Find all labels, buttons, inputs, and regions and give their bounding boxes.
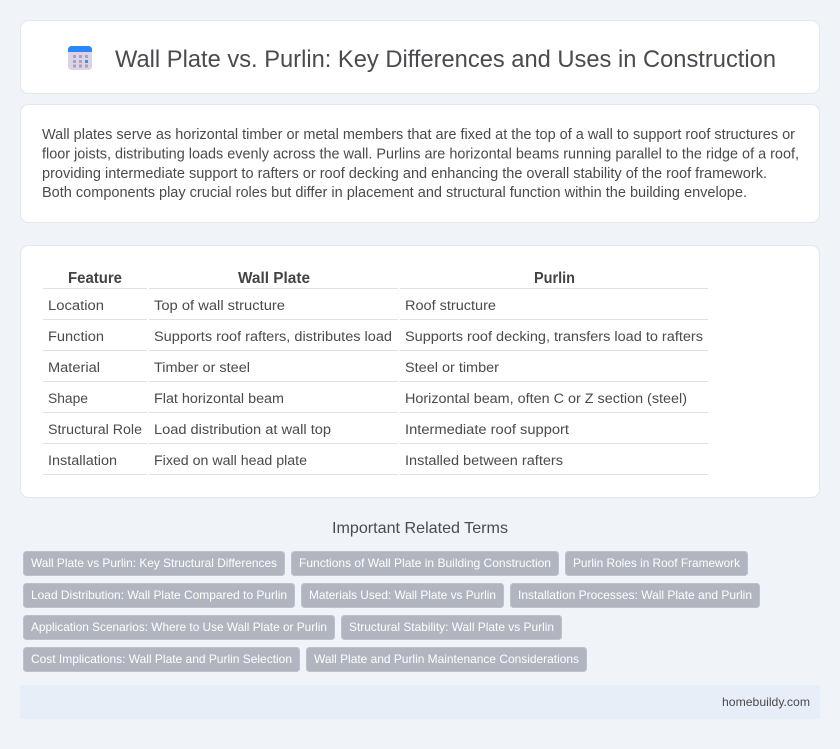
footer source: homebuildy.com [722,695,810,709]
table header: Purlin [534,270,575,287]
table row: installation: Fixed on wall head plate [154,453,307,469]
table row: material [48,360,499,376]
table row: location: Location [48,298,104,314]
tag list: Wall Plate and Purlin Maintenance Considerations [314,652,579,666]
tag list: Load Distribution: Wall Plate Compared to Purlin [31,588,287,602]
table row: location [48,298,496,314]
tag list [24,552,760,672]
tag list: Cost Implications: Wall Plate and Purlin Selection [31,652,292,666]
intro paragraph: providing intermediate support to rafters or roof decking and enhancing the overall stability of the roof framework. [42,166,767,182]
table row: location: Roof structure [405,298,496,314]
table row: shape: Flat horizontal beam [154,391,284,407]
table row: function [48,329,703,345]
tag list: Structural Stability: Wall Plate vs Purlin [349,620,554,634]
panel: title card [20,20,820,94]
table row: installation: Installation [48,453,117,469]
tag list: Installation Processes: Wall Plate and Purlin [518,588,752,602]
table row: structural role [48,422,569,438]
table header [68,270,575,287]
table row: structural role: Load distribution at wall top [154,422,331,438]
panel: intro text [20,104,820,222]
intro paragraph: Wall plates serve as horizontal timber or metal members that are fixed at the top of a wall to support roof structures or [42,127,795,143]
table row: installation [48,453,563,469]
table row: material: Steel or timber [405,360,499,376]
tag list: Materials Used: Wall Plate vs Purlin [309,588,496,602]
panel: comparison table [20,246,820,498]
intro paragraph: Both components play crucial roles but differ in placement and structural function within the building envelope. [42,185,747,201]
footer [20,685,820,719]
intro paragraph: floor joists, distributing loads evenly across the wall. Purlins are horizontal beams running parallel to the ridge of a roof, [42,146,799,162]
intro paragraph [42,127,799,201]
table row: material: Material [48,360,100,376]
table row: location: Top of wall structure [154,298,285,314]
title: Wall Plate vs. Purlin: Key Differences and Uses in Construction [115,46,776,73]
table row: function: Supports roof decking, transfers load to rafters [405,329,703,345]
table header: Feature [68,270,122,287]
icon: calendar [68,46,92,70]
table row: shape: Shape [48,391,88,407]
tag list: Application Scenarios: Where to Use Wall Plate or Purlin [31,620,327,634]
table row: structural role: Intermediate roof support [405,422,569,438]
table row: installation: Installed between rafters [405,453,563,469]
table row: shape: Horizontal beam, often C or Z section (steel) [405,391,687,407]
table row: shape [48,391,687,407]
heading: important related terms: Important Related Terms [332,520,508,537]
table row: function: Function [48,329,104,345]
table row: function: Supports roof rafters, distributes load [154,329,392,345]
tag list: Purlin Roles in Roof Framework [573,556,741,570]
table header: Wall Plate [238,270,310,287]
table row: structural role: Structural Role [48,422,142,438]
tag list: Functions of Wall Plate in Building Construction [299,556,551,570]
tag list: Wall Plate vs Purlin: Key Structural Differences [31,556,277,570]
table row: material: Timber or steel [154,360,250,376]
